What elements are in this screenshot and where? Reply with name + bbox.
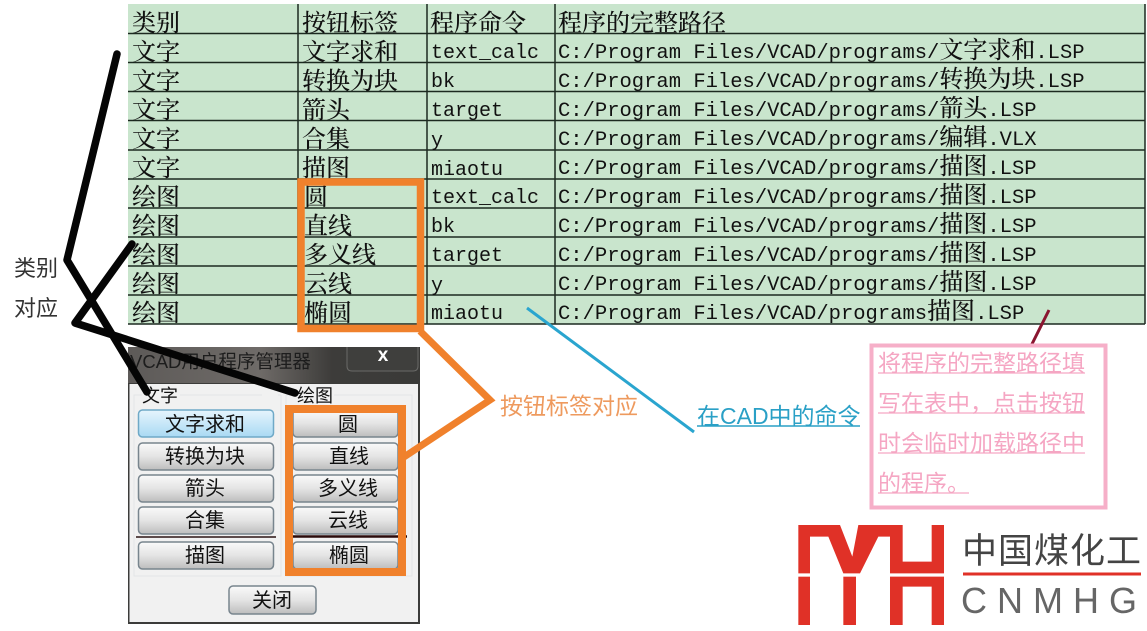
table row 10: C:/Program Files/VCAD/programs描图.LSP bbox=[558, 298, 1024, 327]
table row 8: target bbox=[431, 245, 503, 268]
table row 6 bbox=[132, 182, 1037, 213]
orange box: button labels in table bbox=[301, 182, 420, 328]
button: trace: 描图 bbox=[185, 544, 225, 567]
table row 1: 文字 bbox=[132, 39, 180, 68]
table row 4: 文字 bbox=[132, 126, 180, 155]
button: text sum bbox=[138, 410, 274, 437]
group heading: drawing: 绘图 bbox=[297, 386, 333, 406]
orange box: dialog buttons bbox=[289, 409, 402, 572]
button: ellipse: 椭圆 bbox=[329, 544, 369, 567]
button: ellipse bbox=[293, 542, 398, 569]
button: arrow bbox=[138, 475, 274, 502]
table row 1: C:/Program Files/VCAD/programs/文字求和.LSP bbox=[558, 37, 1085, 66]
table row 5 bbox=[132, 153, 1037, 184]
table row 8: 绘图 bbox=[132, 242, 180, 271]
table row 6: 圆 bbox=[304, 184, 328, 213]
table row 3: C:/Program Files/VCAD/programs/箭头.LSP bbox=[558, 95, 1037, 124]
category annotation label: 类别 bbox=[14, 256, 58, 281]
table row 10 bbox=[132, 298, 1024, 329]
table row 3 bbox=[132, 95, 1037, 126]
logo mark bbox=[798, 525, 944, 625]
table row 4 bbox=[132, 124, 1037, 155]
dialog title: VCAD用户程序管理器 bbox=[130, 351, 311, 372]
table row 1: 文字求和 bbox=[302, 39, 398, 68]
logo Chinese name: 中国煤化工 bbox=[962, 532, 1142, 571]
button: circle bbox=[293, 410, 398, 437]
table row 10: 椭圆 bbox=[304, 300, 352, 329]
table header row: 程序的完整路径 bbox=[558, 10, 726, 39]
table row 2: bk bbox=[431, 71, 455, 94]
button: circle: 圆 bbox=[338, 414, 358, 436]
table row 9: 绘图 bbox=[132, 271, 180, 300]
button: union bbox=[138, 507, 274, 534]
table row 8 bbox=[132, 240, 1037, 271]
category annotation label: 对应 bbox=[14, 296, 58, 321]
button: polyline bbox=[293, 475, 398, 502]
table row 6: C:/Program Files/VCAD/programs/描图.LSP bbox=[558, 182, 1037, 211]
table row 7: 绘图 bbox=[132, 213, 180, 242]
label: command in CAD: 在CAD中的命令 bbox=[697, 403, 861, 429]
table row 9: C:/Program Files/VCAD/programs/描图.LSP bbox=[558, 269, 1037, 298]
dark red arrow: path note bbox=[1031, 310, 1049, 346]
table row 4: C:/Program Files/VCAD/programs/编辑.VLX bbox=[558, 124, 1037, 153]
table header row: 按钮标签 bbox=[302, 10, 398, 39]
table row 10: miaotu bbox=[431, 303, 503, 326]
group heading: text: 文字 bbox=[142, 386, 178, 406]
callout: full path note: 时会临时加载路径中 bbox=[878, 430, 1085, 456]
table header row: 程序命令 bbox=[430, 10, 526, 39]
button: cloud line bbox=[293, 507, 398, 534]
table row 5: C:/Program Files/VCAD/programs/描图.LSP bbox=[558, 153, 1037, 182]
table row 2 bbox=[132, 66, 1085, 97]
label: button label mapping: 按钮标签对应 bbox=[500, 393, 638, 419]
button: text sum: 文字求和 bbox=[165, 413, 245, 436]
table row 9 bbox=[132, 269, 1037, 300]
table row 2: 转换为块 bbox=[302, 68, 398, 97]
button: line: 直线 bbox=[329, 445, 369, 468]
table row 5: 描图 bbox=[302, 155, 350, 184]
table row 3: 文字 bbox=[132, 97, 180, 126]
button: close bbox=[229, 586, 316, 614]
table row 7: 直线 bbox=[304, 213, 352, 242]
table row 9: 云线 bbox=[304, 271, 352, 300]
table row 9: y bbox=[431, 275, 443, 298]
logo: CNMHG bbox=[798, 525, 1147, 625]
logo English name: CNMHG bbox=[961, 580, 1147, 621]
button: line bbox=[293, 443, 398, 470]
table row 1: text_calc bbox=[431, 42, 539, 65]
button: polyline: 多义线 bbox=[318, 477, 378, 500]
table row 2: 文字 bbox=[132, 68, 180, 97]
table: program configuration bbox=[128, 4, 1145, 329]
table row 4: 合集 bbox=[302, 126, 350, 155]
button: close: 关闭 bbox=[252, 589, 292, 612]
table row 1 bbox=[132, 37, 1085, 68]
blue arrow: command bbox=[527, 308, 694, 432]
table row 6: 绘图 bbox=[132, 184, 180, 213]
callout: full path note bbox=[872, 346, 1106, 508]
black arrows: category mapping bbox=[67, 54, 295, 393]
button: arrow: 箭头 bbox=[185, 477, 225, 500]
table row 10: 绘图 bbox=[132, 300, 180, 329]
table row 8: 多义线 bbox=[304, 242, 376, 271]
callout: full path note: 将程序的完整路径填 bbox=[878, 350, 1085, 376]
button: trace bbox=[138, 542, 274, 569]
callout: full path note: 的程序。 bbox=[878, 470, 970, 496]
table row 4: y bbox=[431, 130, 443, 153]
table row 8: C:/Program Files/VCAD/programs/描图.LSP bbox=[558, 240, 1037, 269]
dialog close icon: x bbox=[378, 345, 389, 366]
table row 7: C:/Program Files/VCAD/programs/描图.LSP bbox=[558, 211, 1037, 240]
table header row bbox=[132, 10, 726, 39]
table row 3: 箭头 bbox=[302, 97, 351, 126]
table row 5: 文字 bbox=[132, 155, 180, 184]
button: cloud line: 云线 bbox=[328, 509, 368, 532]
button: convert to block: 转换为块 bbox=[165, 445, 245, 468]
panel: program manager dialog bbox=[128, 345, 420, 624]
table header row: 类别 bbox=[132, 10, 180, 39]
table row 3: target bbox=[431, 100, 503, 123]
button: convert to block bbox=[138, 443, 274, 470]
button: union: 合集 bbox=[185, 509, 225, 532]
table row 6: text_calc bbox=[431, 187, 539, 210]
category annotation label bbox=[14, 256, 58, 321]
orange connector bbox=[404, 331, 490, 457]
table row 2: C:/Program Files/VCAD/programs/转换为块.LSP bbox=[558, 66, 1085, 95]
table row 7 bbox=[132, 211, 1037, 242]
table row 5: miaotu bbox=[431, 159, 503, 182]
callout: full path note: 写在表中，点击按钮 bbox=[878, 390, 1085, 416]
table row 7: bk bbox=[431, 216, 455, 239]
